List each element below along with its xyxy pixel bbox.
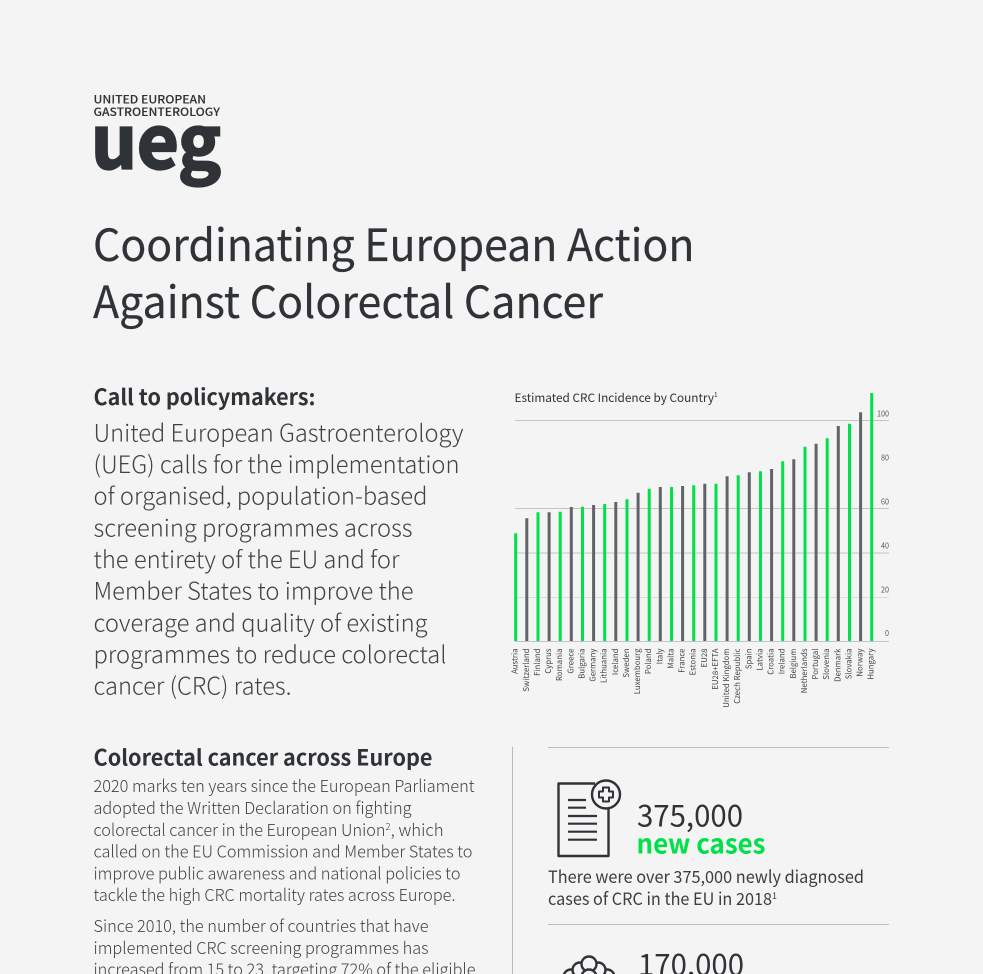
text block: new cases description: cases of CRC in the EU in 2018 xyxy=(548,885,772,910)
text block: new cases description: There were over 375,000 newly diagnosed xyxy=(548,863,864,888)
text block: colorectal cancer across Europe: colorectal cancer in the European Union xyxy=(94,817,386,841)
text block: colorectal cancer across Europe: , which xyxy=(391,817,444,841)
country labels: Italy xyxy=(654,648,665,664)
country labels: Greece xyxy=(565,648,576,674)
logo: UEG: ueg xyxy=(91,84,221,190)
icon: document with medical cross xyxy=(558,780,620,856)
country labels: United Kingdom xyxy=(721,648,732,708)
text block: colorectal cancer across Europe: called on the EU Commission and Member States to xyxy=(94,838,472,862)
country labels: Estonia xyxy=(688,648,699,675)
country labels: Romania xyxy=(554,648,565,681)
country labels: Spain xyxy=(743,648,754,669)
chart title: 1 xyxy=(714,389,718,399)
country labels: Ireland xyxy=(777,648,788,674)
axis labels: 100 xyxy=(877,408,889,420)
text block: call to policymakers paragraph: Member States to improve the xyxy=(94,572,414,606)
country labels: France xyxy=(677,648,688,673)
axis labels: 60 xyxy=(881,496,889,508)
text block: colorectal cancer across Europe xyxy=(94,773,476,974)
country labels: Croatia xyxy=(766,648,777,675)
country labels: Norway xyxy=(855,648,866,677)
text block: colorectal cancer across Europe: tackle the high CRC mortality rates across Europe. xyxy=(94,882,456,906)
country labels: Latvia xyxy=(754,648,766,671)
text block: call to policymakers paragraph: programmes to reduce colorectal xyxy=(94,636,446,670)
text block: call to policymakers paragraph: of organised, population-based xyxy=(94,478,428,512)
text block: call to policymakers paragraph xyxy=(94,414,464,702)
heading: colorectal cancer across Europe: Colorectal cancer across Europe xyxy=(94,740,432,772)
stat: 375,000: 375,000 xyxy=(637,792,743,836)
text block: call to policymakers paragraph: screening programmes across xyxy=(94,510,412,544)
country labels: Denmark xyxy=(832,648,843,682)
axis labels: 40 xyxy=(881,540,889,552)
logo: UEG: UNITED EUROPEAN xyxy=(94,92,206,108)
text block: colorectal cancer across Europe: implemented CRC screening programmes has xyxy=(94,935,428,959)
bars xyxy=(516,393,872,641)
axis labels: 20 xyxy=(881,584,889,596)
stat label: new cases: new cases xyxy=(636,822,766,862)
text block: call to policymakers paragraph: cancer (CRC) rates. xyxy=(94,668,292,702)
country labels: EU28+EFTA xyxy=(710,648,721,690)
axis labels: 0 xyxy=(885,628,889,639)
country labels: Czech Republic xyxy=(732,648,743,704)
title xyxy=(93,210,694,331)
text block: new cases description: 1 xyxy=(772,889,777,902)
text block: call to policymakers paragraph: the entirety of the EU and for xyxy=(94,541,400,575)
title: Coordinating European Action xyxy=(93,210,694,274)
text block: colorectal cancer across Europe: improve public awareness and national policies to xyxy=(94,860,460,884)
text block: new cases description xyxy=(548,863,864,910)
country labels: Cyprus xyxy=(543,648,554,674)
chart title: Estimated CRC Incidence by Country xyxy=(514,389,714,406)
country labels: Austria xyxy=(510,648,521,674)
country labels: Germany xyxy=(588,648,599,682)
heading: call to policymakers: Call to policymakers: xyxy=(94,380,316,412)
country labels: Sweden xyxy=(621,648,632,678)
text block: colorectal cancer across Europe: adopted the Written Declaration on fighting xyxy=(94,795,412,819)
panel: new cases xyxy=(548,780,864,910)
country labels: EU28 xyxy=(699,648,710,667)
country labels: Poland xyxy=(643,648,654,674)
text block: call to policymakers paragraph: United European Gastroenterology xyxy=(94,414,464,448)
text block: call to policymakers paragraph: (UEG) calls for the implementation xyxy=(94,446,460,480)
text block: colorectal cancer across Europe: 2020 marks ten years since the European Parliament xyxy=(94,773,475,797)
country labels: Bulgaria xyxy=(576,648,588,679)
country labels xyxy=(510,648,877,708)
title: Against Colorectal Cancer xyxy=(93,267,604,331)
logo: UEG: GASTROENTEROLOGY xyxy=(94,104,221,120)
country labels: Malta xyxy=(666,648,676,669)
country labels: Hungary xyxy=(866,648,877,680)
text block: colorectal cancer across Europe: Since 2010, the number of countries that have xyxy=(94,913,429,937)
country labels: Slovenia xyxy=(821,648,832,680)
icon: cluster of circles xyxy=(564,956,614,974)
country labels: Switzerland xyxy=(521,648,532,692)
country labels: Luxembourg xyxy=(632,648,643,694)
country labels: Finland xyxy=(532,648,543,676)
text block: colorectal cancer across Europe: 2 xyxy=(386,819,391,833)
text block: call to policymakers paragraph: coverage and quality of existing xyxy=(94,604,428,638)
axis labels: 80 xyxy=(881,452,889,464)
country labels: Portugal xyxy=(810,648,821,680)
country labels: Belgium xyxy=(788,648,799,679)
bar chart: estimated CRC incidence by country xyxy=(510,389,889,708)
axis labels xyxy=(877,408,889,639)
country labels: Slovakia xyxy=(844,648,854,679)
country labels: Iceland xyxy=(610,648,621,675)
panel: 170,000 stat xyxy=(564,940,744,974)
country labels: Netherlands xyxy=(799,648,810,693)
country labels: Lithuania xyxy=(599,648,610,683)
